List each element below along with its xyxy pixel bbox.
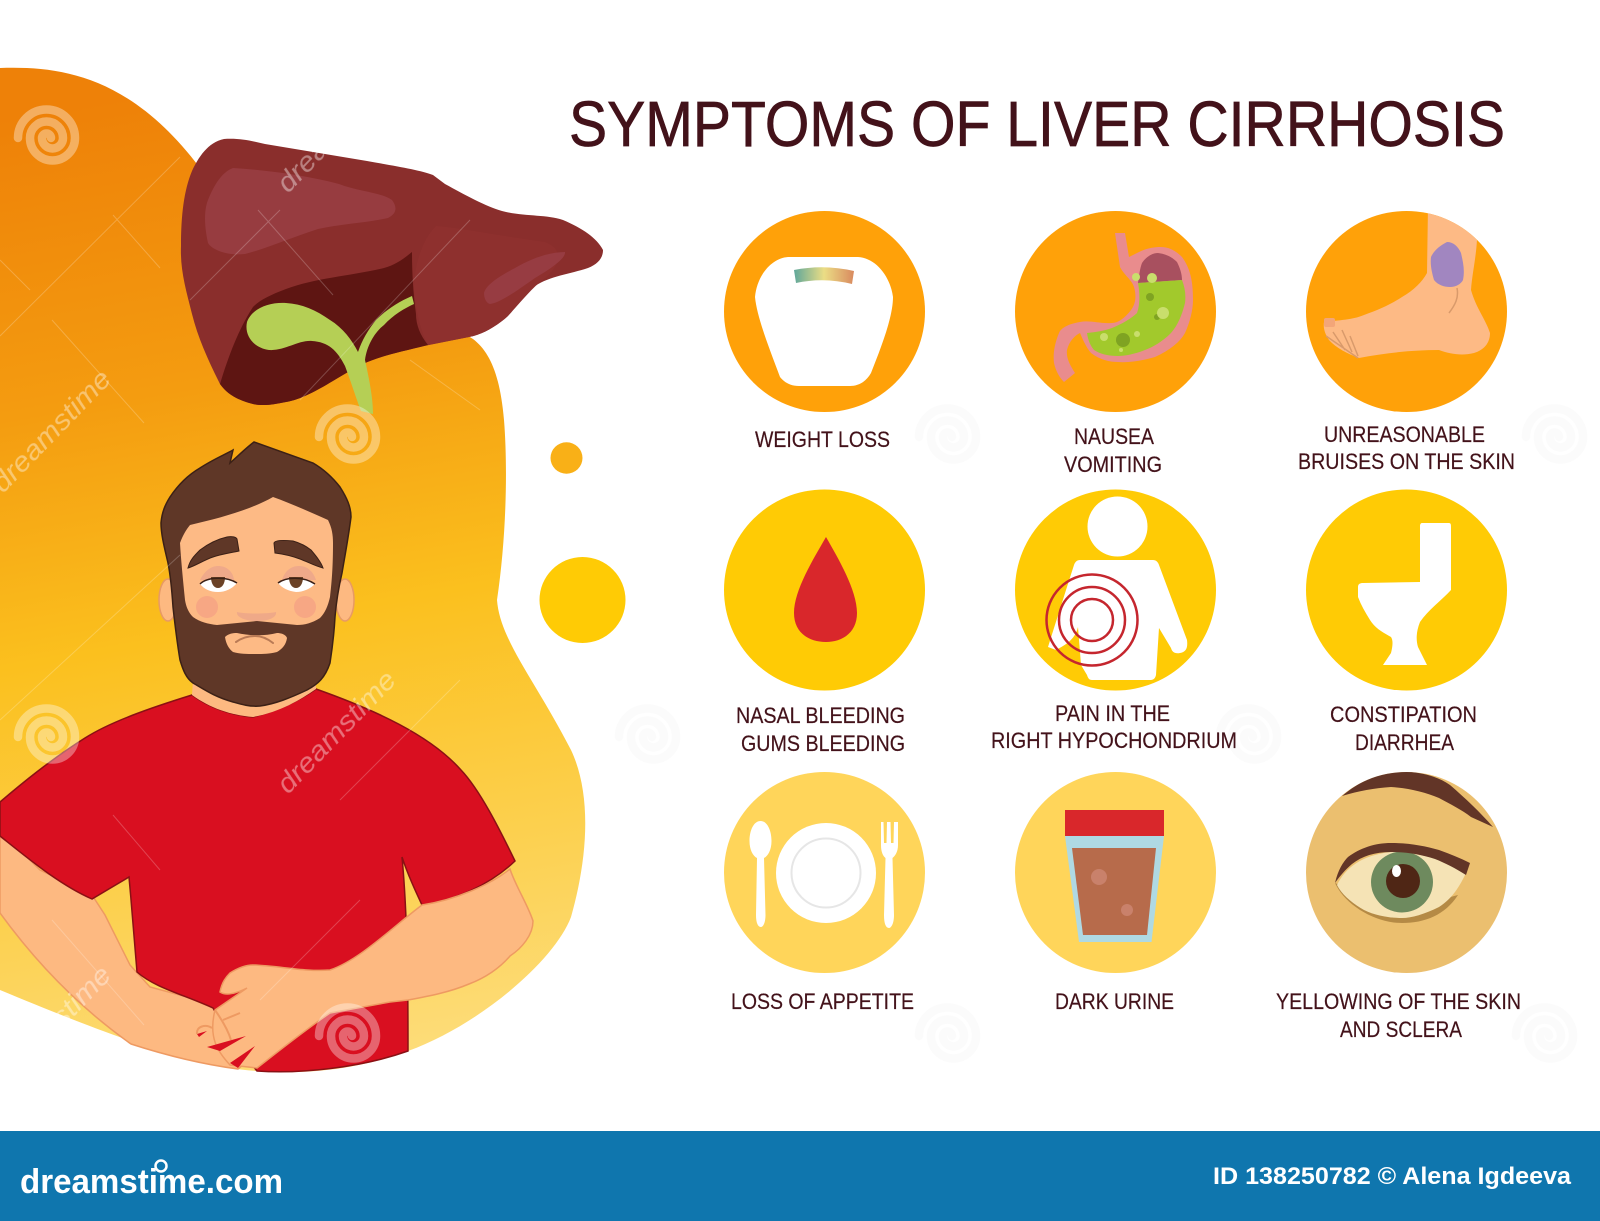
illustration: man [0, 442, 533, 1072]
panel: nausea: VOMITING [1064, 452, 1162, 477]
circle [724, 211, 925, 412]
label: UNREASONABLE [1324, 422, 1485, 447]
scale gauge [794, 267, 854, 284]
panel: bleeding [724, 490, 925, 756]
panel: yellowing: AND SCLERA [1340, 1017, 1462, 1042]
neck [192, 680, 316, 717]
circle [1015, 490, 1216, 690]
icon: foot with bruise [1324, 205, 1490, 358]
gallbladder [246, 296, 414, 414]
icon: bathroom scale [755, 257, 893, 386]
panel: pain: RIGHT HYPOCHONDRIUM [991, 728, 1237, 753]
panel: weight loss [724, 211, 925, 452]
watermark overlay: dreamstime [270, 63, 402, 198]
label: NASAL BLEEDING [736, 703, 905, 728]
decorative circle large [540, 557, 626, 643]
decorative circle small [550, 442, 582, 474]
footer logo spiral [156, 1160, 166, 1172]
panel: bowel: DIARRHEA [1355, 730, 1454, 755]
face [180, 497, 333, 625]
watermark overlay: dreamstime [270, 664, 402, 799]
icon: person with pain rings [1046, 496, 1187, 680]
circle [1306, 211, 1507, 412]
fingers [197, 1031, 255, 1068]
left arm [0, 830, 262, 1069]
liver shaded underside [220, 252, 428, 405]
red shirt [0, 689, 515, 1072]
eyes [200, 577, 315, 592]
panel: bowel [1306, 490, 1507, 755]
illustration: liver and gallbladder [181, 139, 603, 414]
background blob [0, 68, 585, 1072]
panel: bruises: BRUISES ON THE SKIN [1298, 449, 1515, 474]
icon: stomach [1054, 233, 1193, 382]
cheeks [196, 596, 316, 618]
eyelids [200, 566, 316, 580]
circle [724, 490, 925, 690]
right arm and hand [213, 869, 533, 1068]
label: NAUSEA [1074, 424, 1154, 449]
panel: bleeding: GUMS BLEEDING [741, 731, 905, 756]
icon: plate and cutlery [750, 821, 898, 928]
eyebrows [188, 537, 323, 568]
circle [1306, 490, 1507, 690]
right lobe highlight [484, 252, 565, 304]
icon: blood drop [794, 537, 857, 642]
hair and beard [161, 442, 351, 706]
icon: yellow eye [1335, 772, 1493, 923]
label: WEIGHT LOSS [755, 427, 890, 452]
label: PAIN IN THE [1055, 701, 1170, 726]
nose [237, 612, 276, 621]
panel: appetite [724, 772, 925, 1014]
panel: bruises [1298, 205, 1515, 474]
title: SYMPTOMS OF LIVER CIRRHOSIS [569, 88, 1505, 160]
circle [1015, 211, 1216, 412]
footer credit: ID 138250782 © Alena Igdeeva [1213, 1163, 1572, 1190]
footer logo: dreamstime.com [20, 1163, 283, 1201]
label: YELLOWING OF THE SKIN [1276, 989, 1521, 1014]
ears [159, 579, 354, 621]
icon: toilet [1358, 523, 1451, 665]
circle [1015, 772, 1216, 973]
panel: pain [991, 490, 1237, 753]
label: CONSTIPATION [1330, 702, 1477, 727]
panel: yellowing [1276, 772, 1521, 1042]
panel: nausea [1015, 211, 1216, 477]
liver highlight [205, 168, 395, 254]
mouth line [236, 636, 273, 643]
circle [1306, 772, 1507, 973]
mouth patch [225, 633, 287, 654]
panel: dark urine [1015, 772, 1216, 1014]
footer bar [0, 1131, 1600, 1221]
finger lines [197, 1010, 240, 1040]
circle [724, 772, 925, 973]
label: LOSS OF APPETITE [731, 989, 914, 1014]
right lobe shading [414, 226, 558, 345]
liver body [181, 139, 603, 405]
label: DARK URINE [1055, 989, 1174, 1014]
icon: urine cup [1065, 810, 1164, 942]
